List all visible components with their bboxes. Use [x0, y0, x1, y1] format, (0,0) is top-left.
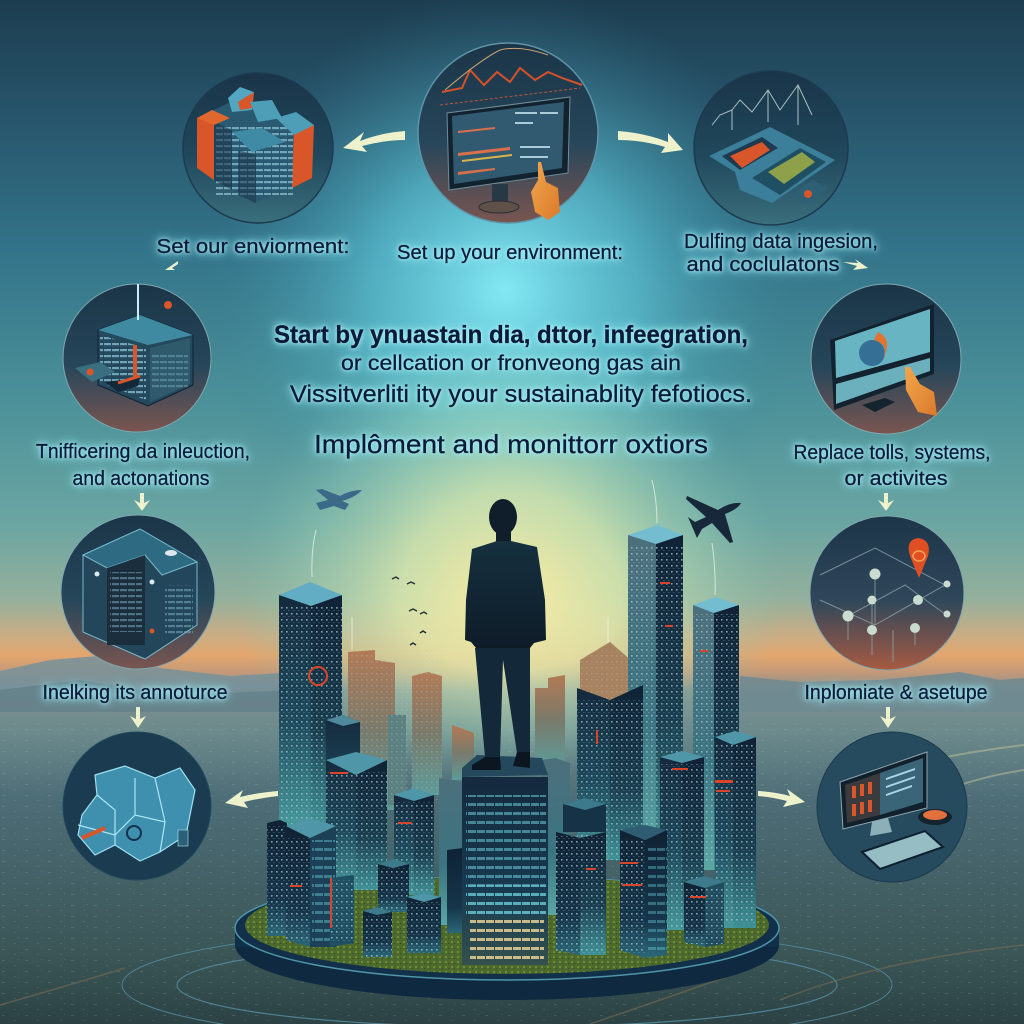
circle: left server tower — [61, 515, 215, 669]
red accents — [290, 582, 733, 928]
central text block: Start by ynuastain dia, dttor, infeegration, — [274, 321, 748, 349]
central text block — [274, 321, 752, 459]
circle: top left servers — [183, 73, 333, 223]
central text block: or cellcation or fronveong gas ain — [341, 352, 681, 375]
mid buildings — [577, 688, 610, 860]
label: left step: Tnifficering da inleuction, — [36, 441, 250, 463]
central text block: Implôment and monittorr oxtiors — [314, 429, 708, 459]
label: top centre step: Set up your environment: — [397, 242, 623, 264]
arrow: left down one — [134, 493, 150, 511]
arrow: lower right — [758, 789, 805, 807]
label: top right step: and coclulatons — [686, 254, 840, 276]
second right tower — [693, 605, 714, 870]
plane: left — [316, 489, 362, 510]
arrow: small top right — [843, 259, 868, 270]
label: right step — [794, 442, 990, 490]
label: top right step: Dulfing data ingesion, — [684, 231, 878, 253]
label: lower left step: Inelking its annoturce — [42, 682, 228, 704]
arrow: lower left — [225, 790, 278, 808]
central text block: Vissitverliti ity your sustainablity fefotiocs. — [290, 381, 752, 408]
arrow: centre to top right — [618, 131, 683, 153]
arrow: small top left — [165, 261, 178, 270]
arrow: left down two — [130, 707, 146, 728]
label: top left step: Set our enviorment: — [156, 236, 350, 258]
label: left step: and actonations — [72, 468, 210, 490]
mid-left block behind — [326, 715, 360, 860]
circle: right computer and keyboard — [817, 732, 967, 882]
label: lower right step: Inplomiate & asetupe — [804, 682, 988, 704]
circle: left servers — [63, 284, 211, 432]
arrow: right down one — [878, 493, 894, 511]
right tall tower — [628, 535, 656, 850]
front buildings — [378, 864, 393, 912]
central tower under man — [462, 755, 548, 965]
plane: right — [686, 496, 741, 543]
far buildings — [348, 642, 633, 810]
label: right step: or activites — [844, 468, 948, 490]
circle: right network nodes — [810, 516, 964, 670]
thin signal arcs — [312, 480, 715, 650]
man standing on tower — [465, 499, 546, 770]
label: left step — [36, 441, 250, 490]
arrows between circles — [130, 131, 896, 808]
arrow: right down two — [880, 707, 896, 728]
arrow: centre to top left — [343, 131, 405, 152]
label: right step: Replace tolls, systems, — [794, 442, 990, 464]
label: top right step — [684, 231, 878, 276]
skyline buildings — [267, 525, 756, 965]
circle: right monitor with hand — [811, 284, 961, 434]
birds — [392, 577, 427, 645]
circle: left hexagon network — [63, 732, 211, 880]
platform with grass — [122, 876, 892, 1024]
circle: top centre monitor — [418, 43, 598, 223]
left tall tower — [279, 595, 311, 825]
circle: top right data board — [694, 71, 848, 225]
